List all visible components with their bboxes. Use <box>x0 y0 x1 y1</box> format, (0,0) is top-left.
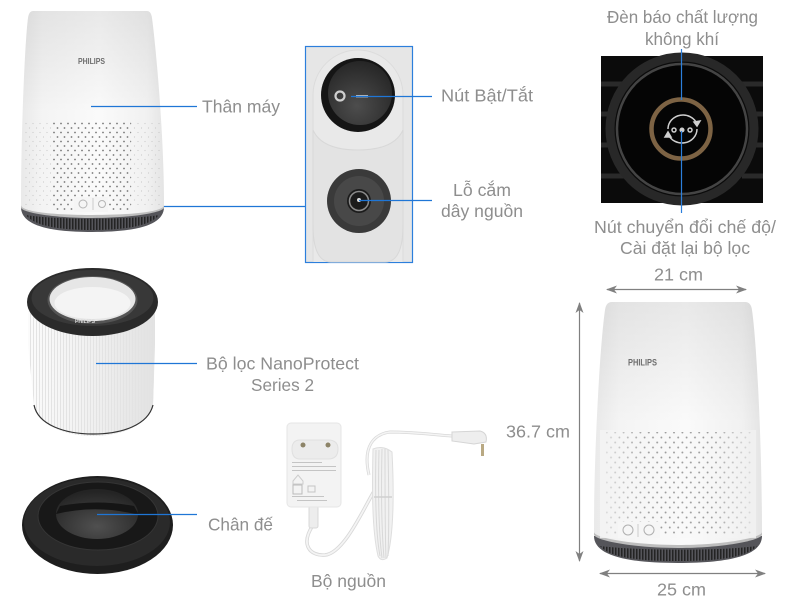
icons: status on dimensioned purifier <box>618 522 660 538</box>
callout line: filter <box>96 362 197 364</box>
callout line: main body <box>91 106 197 108</box>
label: power switch: Nút Bật/Tắt <box>441 84 533 106</box>
callout line: mode button <box>680 131 682 213</box>
label: top width: 21 cm <box>654 264 703 284</box>
logo: Philips on main body: PHILIPS <box>78 57 106 66</box>
callout line: base <box>97 514 197 516</box>
label: filter: Bộ lọc NanoProtect <box>206 354 359 374</box>
label: mode button second line: Cài đặt lại bộ lọc <box>620 238 750 258</box>
label: filter second line: Series 2 <box>251 375 314 395</box>
label: power socket second line: dây nguồn <box>441 201 523 221</box>
dimension arrow: top width <box>607 288 746 290</box>
base stand <box>22 476 173 574</box>
filter cartridge <box>27 268 158 436</box>
purifier main body <box>21 11 164 232</box>
rocker switch <box>321 58 395 132</box>
label: air quality light: Đèn báo chất lượng <box>607 7 758 27</box>
callout line: power switch <box>351 96 432 98</box>
label: bottom width: 25 cm <box>657 580 706 600</box>
callout line: power socket <box>359 200 432 202</box>
label: base: Chân đế <box>208 514 273 534</box>
dimension arrow: bottom width <box>600 572 765 574</box>
label: power socket: Lỗ cắm <box>453 179 511 200</box>
power socket <box>327 169 391 233</box>
label: air quality light second line: không khí <box>645 29 719 49</box>
power adapter with cable <box>287 423 486 560</box>
label: height: 36.7 cm <box>506 422 570 442</box>
logo: Philips on filter: PHILIPS <box>75 319 96 325</box>
indicator ring <box>652 100 710 158</box>
icons: filter status on main body <box>74 197 108 212</box>
callout line: air quality light <box>680 49 682 100</box>
label: mode button: Nút chuyển đổi chế độ/ <box>594 217 776 237</box>
label: adapter: Bộ nguồn <box>311 571 386 591</box>
callout line: body to rear panel <box>164 206 305 208</box>
logo: Philips on dimensioned purifier: PHILIPS <box>628 358 657 368</box>
label: main body: Thân máy <box>202 96 280 116</box>
photo: control panel close-up <box>601 56 763 203</box>
dimensioned purifier <box>594 302 762 563</box>
panel: rear switch and power socket <box>306 46 412 262</box>
mode icon <box>665 115 700 143</box>
dimension arrow: height <box>578 303 580 561</box>
